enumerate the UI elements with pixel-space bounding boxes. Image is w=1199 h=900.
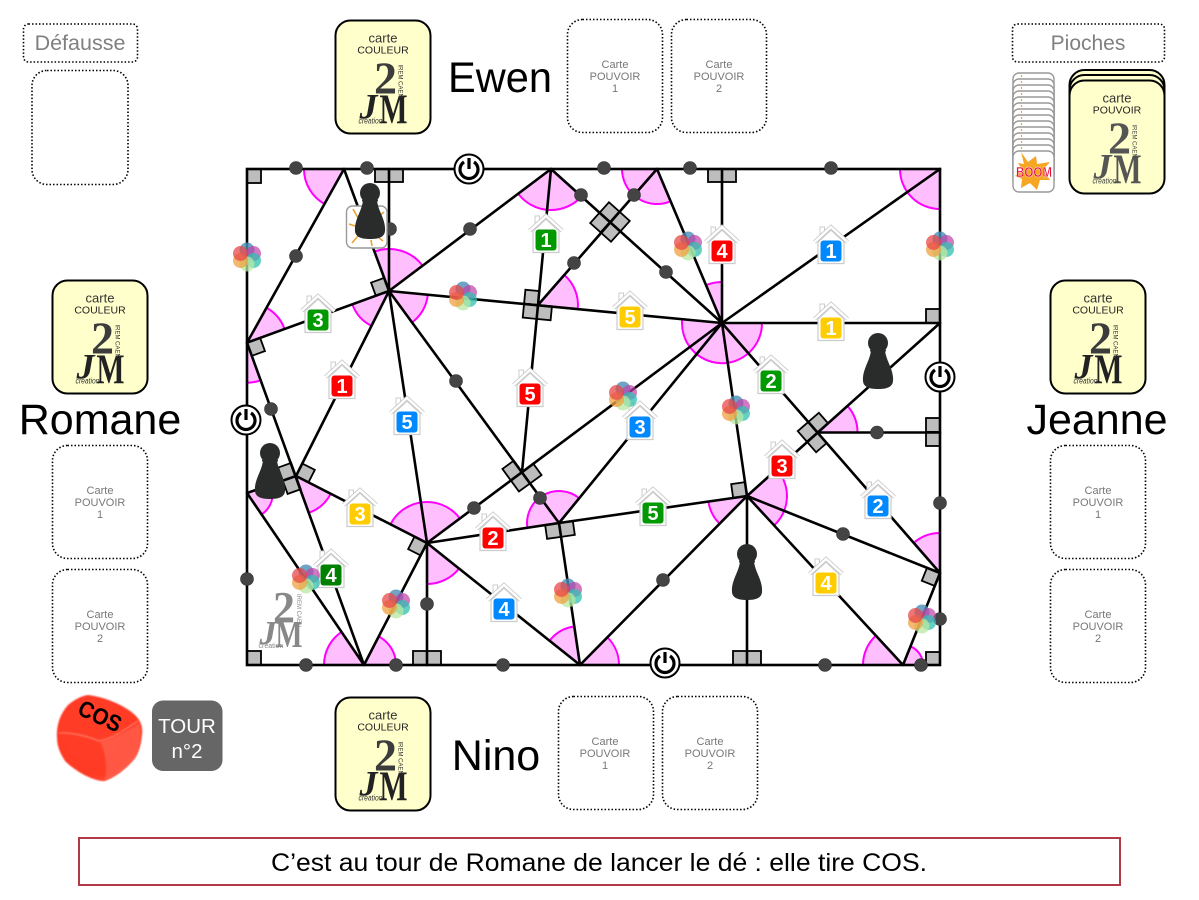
power card slot Nino 2: 2 (707, 760, 713, 772)
game board (232, 154, 954, 678)
power card slot Ewen 2 (672, 20, 766, 132)
power card slot Romane 1: Carte (87, 485, 113, 497)
houses (302, 216, 894, 622)
power card slot Ewen 1: Carte (602, 59, 628, 71)
card: colour card Romane: J (76, 346, 96, 386)
house blue 2: 2 (872, 496, 884, 518)
draw pile: power cards: POUVOIR (1093, 104, 1142, 116)
power card slot Jeanne 2: Carte (1085, 609, 1111, 621)
die showing COS: COS (74, 695, 126, 737)
draw pile: event cards with BOOM: BOOM (1016, 164, 1052, 181)
power card slot Romane 2: POUVOIR (75, 621, 125, 633)
power card slot Jeanne 1: POUVOIR (1073, 497, 1123, 509)
power card slot Romane 1 (52, 446, 148, 558)
right-angle markers (247, 169, 940, 665)
power card slot Ewen 2: Carte (706, 59, 732, 71)
house green 3: 3 (312, 310, 324, 332)
card: colour card Jeanne: création (1074, 376, 1098, 386)
power card slot Romane 2: Carte (87, 609, 113, 621)
draw pile: power cards: 2 (1108, 112, 1131, 164)
house green 2: 2 (765, 371, 777, 393)
power card slot Ewen 2: POUVOIR (694, 71, 744, 83)
event card under pawn (346, 206, 387, 248)
card: colour card Ewen: J (358, 86, 378, 126)
angle sectors (247, 169, 940, 665)
card: colour card Jeanne: IREM CAEN (1112, 324, 1118, 358)
IREM logo watermark: création (259, 643, 284, 650)
power card slot Nino 1 (558, 696, 654, 810)
draw pile: power cards: carte (1103, 90, 1131, 106)
house blue 2 (862, 482, 894, 518)
player name: Jeanne: Jeanne (1026, 396, 1168, 444)
pawn bottom (732, 544, 762, 600)
power card slot Jeanne 2: 2 (1095, 633, 1101, 645)
turn counter (152, 700, 222, 771)
house green 5: 5 (647, 503, 659, 525)
house yellow 3: 3 (354, 504, 366, 526)
card: colour card Jeanne: J (1074, 346, 1094, 386)
draw pile: power cards: M (1114, 148, 1142, 194)
house blue 5 (390, 398, 424, 434)
house red 5 (514, 370, 546, 406)
house red 4: 4 (716, 241, 728, 263)
house red 4 (706, 227, 738, 264)
die showing COS (57, 695, 142, 781)
card: colour card Romane: IREM CAEN (114, 324, 120, 358)
card: colour card Nino: 2 (374, 730, 397, 780)
house green 1: 1 (540, 230, 552, 252)
house red 2: 2 (487, 528, 499, 550)
card: colour card Ewen: carte (369, 30, 397, 46)
card: colour card Jeanne: M (1094, 348, 1122, 394)
draw pile: power cards: J (1092, 146, 1112, 186)
card: colour card Romane (52, 280, 148, 394)
card: colour card Ewen: création (358, 116, 383, 126)
card: colour card Romane: création (76, 376, 100, 386)
discard pile slot (32, 70, 128, 184)
house yellow 5: 5 (624, 307, 636, 329)
card: colour card Ewen: COULEUR (357, 44, 409, 56)
card: colour card Nino: création (358, 794, 383, 802)
turn counter: n°2 (171, 740, 203, 763)
card: colour card Ewen: 2 (374, 52, 397, 104)
label: Défausse (24, 24, 138, 62)
card: colour card Nino: M (380, 764, 408, 810)
status banner (79, 838, 1120, 885)
pawn left (255, 443, 285, 499)
house green 4: 4 (325, 565, 337, 587)
IREM logo watermark: 2 (273, 583, 295, 632)
power card slot Jeanne 1: 1 (1095, 509, 1101, 521)
power card slot Nino 1: POUVOIR (580, 748, 630, 760)
house yellow 4: 4 (820, 573, 832, 595)
waypoints (240, 162, 946, 672)
house blue 1: 1 (825, 241, 837, 263)
house blue 4: 4 (498, 599, 510, 621)
colour flowers (233, 232, 954, 634)
house green 1 (530, 216, 562, 252)
house green 4 (314, 551, 348, 588)
power card slot Nino 2 (662, 696, 758, 810)
card: colour card Romane: COULEUR (74, 304, 126, 316)
card: colour card Romane: M (96, 348, 124, 394)
power card slot Nino 1: Carte (592, 736, 618, 748)
house blue 4 (488, 585, 520, 622)
board lines (247, 169, 940, 665)
pawn Romane (355, 183, 385, 239)
turn counter: TOUR (158, 715, 216, 738)
draw pile: power cards (1070, 70, 1164, 194)
card: colour card Nino: J (358, 764, 378, 804)
house yellow 5 (614, 293, 646, 330)
card: colour card Jeanne: 2 (1089, 312, 1112, 364)
draw pile: event cards with BOOM (1013, 73, 1054, 192)
house blue 3: 3 (634, 417, 646, 439)
IREM logo watermark: IREM CAEN (295, 594, 301, 627)
power icons (232, 154, 954, 678)
card: colour card Ewen (336, 20, 430, 134)
draw pile: power cards: création (1092, 176, 1117, 186)
card: colour card Ewen: M (380, 88, 408, 134)
power card slot Nino 1: 1 (602, 760, 608, 772)
card: colour card Nino (336, 698, 430, 810)
house yellow 4 (810, 559, 842, 596)
player name: Nino: Nino (452, 732, 540, 780)
card: colour card Jeanne (1050, 280, 1146, 394)
house red 1: 1 (336, 376, 348, 398)
card: colour card Jeanne: COULEUR (1072, 304, 1124, 316)
house red 2 (476, 514, 510, 550)
power card slot Ewen 1: POUVOIR (590, 71, 640, 83)
power card slot Ewen 2: 2 (716, 83, 722, 95)
house red 3 (766, 442, 798, 478)
power card slot Romane 2 (52, 570, 148, 682)
power card slot Romane 1: 1 (97, 509, 103, 521)
card: colour card Nino: IREM CAEN (396, 742, 402, 775)
power card slot Jeanne 1 (1050, 446, 1146, 558)
label: Pioches (1012, 24, 1164, 62)
house green 2 (754, 357, 788, 394)
label: Pioches: Pioches (1051, 32, 1125, 55)
house red 5: 5 (524, 384, 536, 406)
house blue 3 (624, 403, 656, 440)
card: colour card Jeanne: carte (1084, 290, 1112, 306)
card: colour card Nino: carte (369, 708, 397, 722)
player name: Ewen: Ewen (448, 54, 552, 102)
house yellow 1: 1 (825, 318, 837, 340)
house yellow 3 (344, 490, 376, 526)
house red 1 (326, 362, 358, 398)
power card slot Ewen 1 (568, 20, 662, 132)
IREM logo watermark (258, 583, 302, 656)
power card slot Romane 2: 2 (97, 633, 103, 645)
draw pile: power cards: IREM CAEN (1130, 124, 1136, 158)
card: colour card Romane: 2 (91, 312, 114, 364)
power card slot Jeanne 1: Carte (1085, 485, 1111, 497)
house yellow 1 (814, 304, 848, 340)
card: colour card Ewen: IREM CAEN (396, 64, 402, 98)
house red 3: 3 (776, 456, 788, 478)
power card slot Nino 2: POUVOIR (685, 748, 735, 760)
card: colour card Nino: COULEUR (357, 722, 409, 734)
status banner: C’est au tour de Romane de lancer le dé : elle tire COS. (271, 849, 927, 877)
pawn Jeanne (863, 333, 893, 389)
house green 5 (636, 489, 670, 526)
house blue 1 (814, 227, 848, 264)
power card slot Jeanne 2: POUVOIR (1073, 621, 1123, 633)
label: Défausse: Défausse (35, 31, 125, 55)
IREM logo watermark: J (258, 615, 278, 652)
IREM logo watermark: M (276, 614, 302, 656)
house blue 5: 5 (401, 412, 413, 434)
power card slot Ewen 1: 1 (612, 83, 618, 95)
power card slot Romane 1: POUVOIR (75, 497, 125, 509)
player name: Romane: Romane (19, 396, 181, 444)
power card slot Jeanne 2 (1050, 570, 1146, 682)
card: colour card Romane: carte (86, 290, 114, 306)
house green 3 (302, 296, 334, 332)
power card slot Nino 2: Carte (697, 736, 723, 748)
